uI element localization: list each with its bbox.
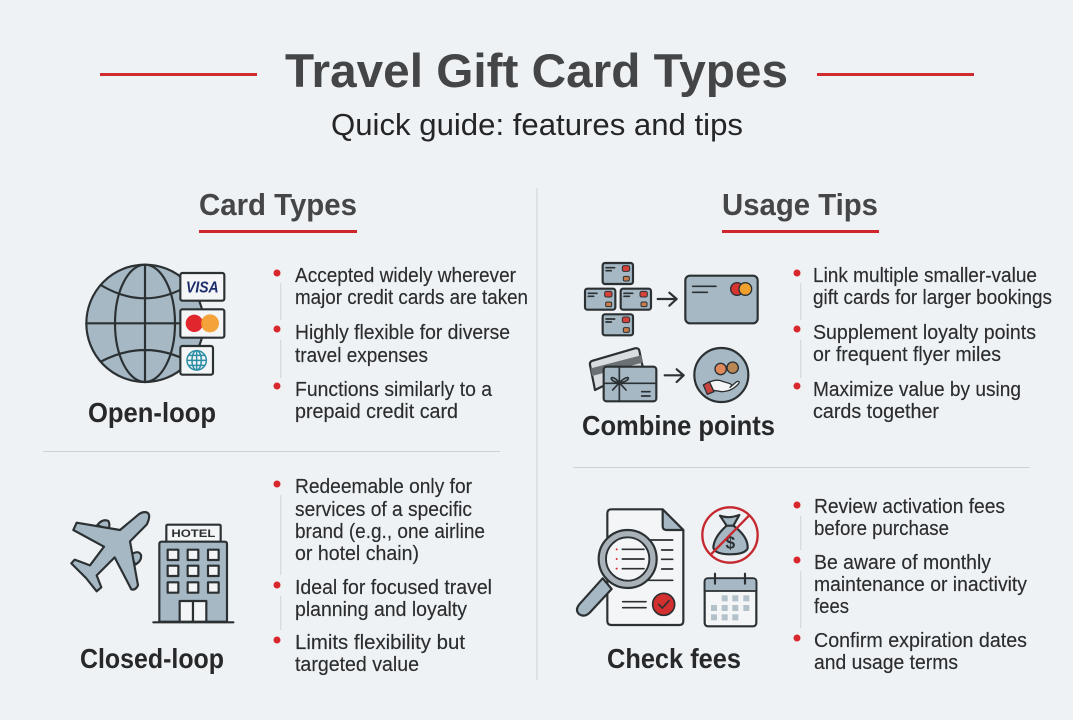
icon: gift cards converted to points [590, 348, 748, 402]
icon: no money bag: $ [726, 532, 736, 552]
bullet list: open-loop: prepaid credit card [295, 400, 458, 423]
bullet list: closed-loop: brand (e.g., one airline [295, 520, 485, 543]
bullet list: open-loop [274, 264, 528, 423]
bullet list: check fees: and usage terms [814, 651, 958, 674]
heading: usage tips: Usage Tips [722, 187, 878, 222]
bullet list: check fees: fees [814, 595, 849, 618]
icon: airplane [71, 512, 149, 591]
bullet list: check fees: Confirm expiration dates [814, 629, 1027, 652]
bullet list: closed-loop: services of a specific [295, 498, 472, 521]
icon: hotel building [153, 525, 233, 622]
bullet list: combine points: gift cards for larger bookings [813, 286, 1052, 309]
bullet list: combine points: or frequent flyer miles [813, 343, 1001, 366]
title: Travel Gift Card Types [285, 44, 788, 97]
bullet list: combine points: Link multiple smaller-value [813, 264, 1037, 287]
icon: no money bag [702, 507, 758, 563]
icon: globe with payment cards: VISA [186, 279, 219, 296]
icon: globe with payment cards [86, 265, 224, 382]
label: open-loop: Open-loop [88, 397, 216, 428]
panel: check fees [577, 495, 1028, 674]
title rule right [817, 73, 974, 76]
bullet list: check fees: before purchase [814, 517, 949, 540]
bullet list: check fees [794, 495, 1028, 674]
bullet list: closed-loop: Redeemable only for [295, 475, 472, 498]
bullet list: closed-loop: targeted value [295, 653, 419, 676]
bullet list: closed-loop: Limits flexibility but [295, 631, 465, 654]
bullet list: open-loop: major credit cards are taken [295, 286, 528, 309]
icon: small cards merging into one card [585, 263, 758, 335]
bullet list: combine points: Maximize value by using [813, 378, 1021, 401]
subtitle: Quick guide: features and tips [331, 107, 743, 142]
label: closed-loop: Closed-loop [80, 643, 224, 674]
panel: closed-loop [71, 475, 492, 676]
bullet list: closed-loop [274, 475, 492, 676]
label: combine points: Combine points [582, 410, 775, 441]
heading: card types: Card Types [199, 187, 357, 222]
bullet list: check fees: Review activation fees [814, 495, 1005, 518]
bullet list: open-loop: Functions similarly to a [295, 378, 493, 401]
title rule left [100, 73, 257, 76]
bullet list: closed-loop: planning and loyalty [295, 598, 468, 621]
bullet list: closed-loop: Ideal for focused travel [295, 576, 492, 599]
panel: combine points [582, 263, 1052, 441]
bullet list: combine points: cards together [813, 400, 939, 423]
bullet list: open-loop: Highly flexible for diverse [295, 321, 510, 344]
bullet list: check fees: Be aware of monthly [814, 551, 992, 574]
bullet list: open-loop: Accepted widely wherever [295, 264, 516, 287]
bullet list: check fees: maintenance or inactivity [814, 573, 1028, 596]
panel: open-loop [86, 264, 528, 428]
icon: hotel building: HOTEL [171, 528, 215, 540]
bullet list: combine points [794, 264, 1052, 423]
icon: document with magnifier [577, 509, 683, 625]
label: check fees: Check fees [607, 643, 741, 674]
bullet list: closed-loop: or hotel chain) [295, 542, 419, 565]
icon: calendar [705, 574, 756, 626]
bullet list: combine points: Supplement loyalty points [813, 321, 1036, 344]
bullet list: open-loop: travel expenses [295, 344, 428, 367]
